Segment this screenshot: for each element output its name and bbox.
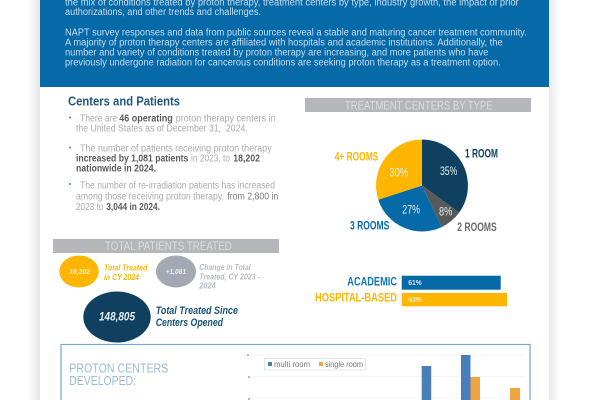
text block: centers and patients bullets: 2023 to [76, 202, 104, 213]
pie chart: treatment centers by type: 1 ROOM [465, 149, 498, 161]
bar chart: affiliation: 61% [408, 278, 422, 287]
stat: change in total treated: +1,081 [166, 267, 186, 276]
pie chart: treatment centers by type: 2 ROOMS [457, 222, 497, 234]
stat: total treated since centers opened: Centers Opened [156, 317, 223, 329]
heading: proton centers developed [69, 360, 169, 388]
text block: centers and patients bullets [69, 114, 278, 213]
bar chart: affiliation: HOSPITAL-BASED [315, 292, 397, 304]
bar chart: affiliation [315, 276, 507, 306]
bar chart: affiliation: ACADEMIC [347, 276, 397, 288]
text block: centers and patients bullets: The number of re-irradiation patients has increased [80, 181, 275, 192]
heading: proton centers developed: PROTON CENTERS [69, 360, 169, 375]
chart: multi room and single room centers: multi room [274, 360, 310, 369]
pie chart: treatment centers by type: 3 ROOMS [350, 220, 390, 232]
stat: total treated since centers opened [83, 292, 238, 342]
panel: proton centers developed [61, 344, 530, 400]
panel: intro header: previously undergone radiation for cancerous conditions are seeking proton therapy as a treatment option. [65, 57, 501, 68]
text block: centers and patients bullets: 46 operating [119, 114, 173, 125]
stat: treated in CY 2024: in CY 2024 [104, 272, 139, 282]
panel: intro header: NAPT survey responses and data from public sources reveal a stable and maturing cancer treatment community. [65, 27, 527, 38]
stat: change in total treated [156, 256, 260, 290]
heading: treatment centers by type: TREATMENT CENTERS BY TYPE [345, 100, 493, 112]
heading: proton centers developed: DEVELOPED: [69, 373, 136, 388]
heading: total patients treated: TOTAL PATIENTS TREATED [105, 239, 232, 253]
pie chart: treatment centers by type: 8% [439, 205, 453, 219]
stat: change in total treated: Treated, CY 2023 - [199, 271, 260, 281]
stat: change in total treated: Change in Total [199, 262, 251, 272]
text block: centers and patients bullets: increased by 1,081 patients [76, 154, 189, 165]
chart: multi room and single room centers [247, 354, 525, 400]
pie chart: treatment centers by type: 27% [402, 203, 420, 217]
heading: total patients treated [53, 239, 279, 253]
panel: intro header: A majority of proton therapy centers are affiliated with hospitals and academic institutions. Additionally, the [65, 37, 503, 48]
stat: total treated since centers opened: 148,805 [99, 312, 136, 324]
bar chart: affiliation: 63% [408, 295, 422, 304]
text block: centers and patients bullets: 3,044 in 2024. [106, 202, 160, 213]
stat: change in total treated: 2024 [198, 280, 216, 290]
text block: centers and patients bullets: 18,202 [233, 154, 260, 165]
chart: multi room and single room centers: single room [325, 360, 363, 369]
stat: total treated since centers opened: Total Treated Since [156, 305, 238, 317]
text block: centers and patients bullets: There are [80, 114, 118, 125]
text block: centers and patients bullets: the United States as of December 31, 2024. [76, 124, 248, 135]
pie chart: treatment centers by type: 4+ ROOMS [335, 151, 379, 163]
stat: treated in CY 2024: Total Treated [104, 263, 148, 273]
text block: centers and patients bullets: nationwide in 2024. [76, 164, 156, 175]
pie chart: treatment centers by type: 35% [440, 164, 458, 178]
panel: intro header: authorizations, and other trends and challenges. [65, 7, 261, 18]
heading: centers and patients: Centers and Patients [68, 94, 180, 108]
text block: centers and patients bullets: The number of patients receiving proton therapy [80, 144, 272, 155]
text block: centers and patients bullets: from 2,800 in [227, 191, 278, 202]
stat: treated in CY 2024 [59, 256, 148, 288]
pie chart: treatment centers by type: 30% [389, 166, 409, 180]
text block: centers and patients bullets: proton therapy centers in [176, 114, 276, 125]
text block: centers and patients bullets: among those receiving proton therapy, [76, 191, 224, 202]
stat: treated in CY 2024: 18,202 [69, 267, 91, 276]
panel: intro header [40, 0, 549, 87]
heading: treatment centers by type [305, 98, 531, 112]
text block: centers and patients bullets: in 2023, to [191, 154, 230, 165]
pie chart: treatment centers by type [335, 140, 498, 234]
panel: intro header: number and variety of conditions treated by proton therapy are increasing, and more patients who have [65, 47, 489, 58]
